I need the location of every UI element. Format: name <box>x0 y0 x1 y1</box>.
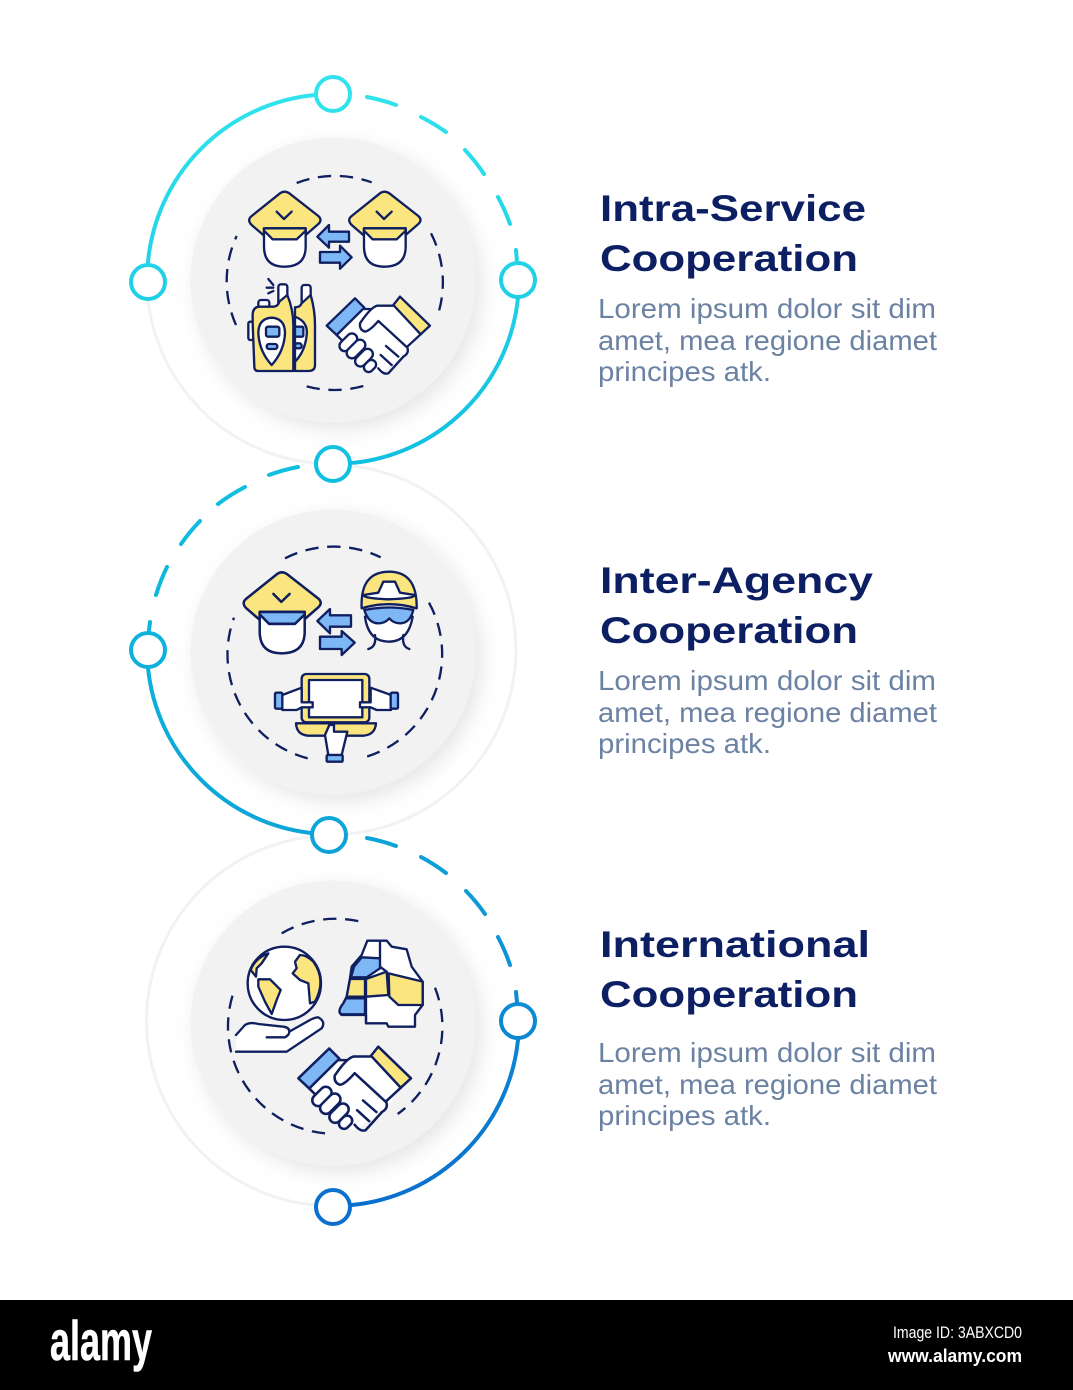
alamy logo: alamy <box>50 1309 152 1372</box>
grey disc 2 <box>190 510 476 794</box>
text block 3 <box>598 924 937 1131</box>
ring 3 nodes <box>316 1004 535 1224</box>
body 3: Lorem ipsum dolor sit dim <box>598 1037 936 1068</box>
icon group 2 <box>227 547 442 762</box>
ring 1 dashed arc <box>367 97 517 262</box>
walkie-talkies <box>248 279 315 371</box>
ring 3 dashed arc <box>367 838 517 1002</box>
step 1: intra-service circle <box>131 77 535 481</box>
handshake 2 <box>298 1047 411 1131</box>
exchange arrows 2 <box>317 609 355 655</box>
map of regions <box>340 941 423 1027</box>
globe in hand <box>236 947 323 1052</box>
dashed icon frame 2 <box>227 547 442 758</box>
body 1: principes atk. <box>598 356 771 387</box>
body 2: Lorem ipsum dolor sit dim <box>598 665 936 696</box>
heading 1: Cooperation <box>600 238 858 279</box>
light ring 2 <box>348 466 516 834</box>
step 3: international circle <box>147 837 535 1224</box>
officer <box>244 572 321 653</box>
light ring 3 <box>147 837 315 1205</box>
image id: Image ID: 3ABXCD0 <box>893 1323 1022 1342</box>
body 3: amet, mea regione diamet <box>598 1069 937 1100</box>
dashed icon frame 1 <box>227 176 443 390</box>
website: www.alamy.com <box>887 1346 1022 1366</box>
heading 3: Cooperation <box>600 974 858 1015</box>
soldier <box>362 572 417 649</box>
icon group 1 <box>227 176 443 390</box>
dashed icon frame 3 <box>228 919 442 1133</box>
icon group 3 <box>228 919 442 1133</box>
step 2: inter-agency circle <box>131 466 516 852</box>
body 1: Lorem ipsum dolor sit dim <box>598 293 936 324</box>
ring 1 solid arcs <box>148 95 518 463</box>
heading 1: Intra-Service <box>600 188 866 229</box>
laptop with hands <box>275 674 398 762</box>
ring 2 dashed arc <box>149 467 298 630</box>
body 3: principes atk. <box>598 1100 771 1131</box>
text block 1 <box>598 188 937 387</box>
ring 2 solid arc <box>148 668 311 833</box>
footer bar <box>0 1300 1073 1390</box>
text block 2 <box>598 560 937 759</box>
handshake 1 <box>327 297 430 374</box>
grey disc 1 <box>190 138 476 422</box>
exchange arrows 1 <box>317 225 352 269</box>
heading 2: Inter-Agency <box>600 560 874 601</box>
officer left <box>249 192 320 267</box>
heading 3: International <box>600 924 870 965</box>
ring 3 solid arc <box>352 1040 518 1205</box>
body 2: principes atk. <box>598 728 771 759</box>
heading 2: Cooperation <box>600 610 858 651</box>
ring 1 nodes <box>131 77 535 481</box>
grey disc 3 <box>190 880 476 1166</box>
body 1: amet, mea regione diamet <box>598 325 937 356</box>
body 2: amet, mea regione diamet <box>598 697 937 728</box>
officer right <box>349 192 420 267</box>
light ring 1 <box>148 300 315 463</box>
ring 2 nodes <box>131 633 346 852</box>
